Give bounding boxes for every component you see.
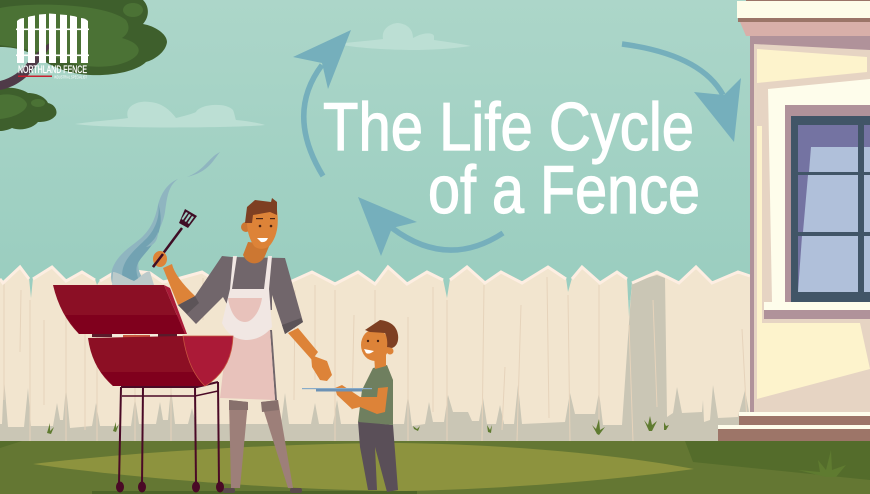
man: apron pocket (228, 298, 262, 322)
fence boards (0, 266, 750, 441)
lawn shadow left (0, 441, 22, 448)
cloud: top centre (337, 23, 471, 50)
house (718, 0, 870, 441)
man: lowered arm (288, 328, 318, 360)
sky background (0, 0, 870, 300)
fence top caps (0, 267, 750, 284)
man: open hand (311, 355, 332, 381)
man (153, 198, 332, 493)
boy: shirt (358, 365, 393, 425)
cloud: left (75, 102, 265, 128)
window pane shadows (798, 125, 870, 292)
arrow: upper right cycle (622, 44, 741, 142)
man: hand holding spatula (153, 251, 167, 267)
logo: red rule (18, 76, 52, 77)
grass lawn (0, 441, 870, 494)
man: hair (245, 198, 277, 223)
fence base shadow and weathered board (0, 275, 750, 441)
grill (53, 285, 233, 492)
house: wall side (750, 36, 870, 416)
house: roof band (737, 0, 870, 22)
man: head (241, 198, 278, 249)
title line 1: The Life Cycle (323, 89, 694, 165)
house: window frame shadow (785, 105, 870, 302)
man: neck (243, 242, 270, 263)
lawn shadow right (685, 441, 870, 480)
house: cream highlight top (757, 49, 867, 83)
grill: open lid (53, 285, 187, 334)
window pane light (798, 147, 870, 292)
man: brows and eyes (256, 218, 275, 227)
house: wall face (754, 44, 870, 413)
house: roof soffit (740, 22, 870, 36)
boy: trousers (358, 421, 398, 492)
man: raised arm (163, 264, 195, 305)
logo: Northland Fence (16, 14, 89, 80)
man: apron skirt (220, 330, 275, 400)
boy: arms (335, 385, 388, 414)
grill: wheels (116, 482, 224, 492)
man: legs (229, 400, 293, 488)
logo: tagline: INDUSTRIAL SPECIALIST (54, 74, 87, 80)
house: cream highlight bottom (757, 126, 870, 399)
boy: head (361, 320, 398, 361)
grill: hinge and rack (92, 334, 177, 338)
fence (0, 266, 750, 441)
boy: neck (374, 355, 386, 369)
man: smile (257, 238, 268, 242)
boy: hair (365, 320, 398, 348)
title line 2: of a Fence (428, 152, 700, 228)
grill: end cap (183, 336, 233, 386)
ground shadow (92, 491, 417, 494)
boy: eyes (367, 340, 379, 342)
smoke (111, 152, 220, 285)
logo: company name: NORTHLAND FENCE (18, 64, 87, 76)
house: window (791, 116, 870, 302)
fence wood grain (4, 277, 748, 441)
grass tufts (47, 416, 846, 477)
tree: lower canopy (0, 88, 57, 131)
logo: fence pickets (16, 14, 89, 63)
lawn highlight (33, 443, 694, 491)
tree: upper canopy (0, 0, 167, 75)
boy (302, 320, 398, 492)
grill: body (88, 336, 205, 386)
man: spatula grip (153, 254, 163, 267)
man: sleeve cuffs (178, 296, 303, 334)
grill: legs (119, 382, 219, 484)
house: window sill (764, 302, 870, 319)
man: shoes (223, 488, 302, 493)
boy: smile (364, 349, 374, 354)
boy: plate (302, 388, 372, 392)
title (323, 89, 700, 228)
man: apron edge (270, 330, 277, 400)
grill: body lower band (101, 372, 205, 386)
arrow: bottom cycle (358, 197, 503, 256)
spatula (153, 209, 197, 267)
arrow: upper left cycle (293, 30, 351, 176)
house: steps (718, 412, 870, 441)
man: shirt (178, 256, 303, 334)
man: apron bib (222, 256, 272, 340)
house: window trim (768, 79, 870, 302)
tree: branch (0, 38, 56, 90)
